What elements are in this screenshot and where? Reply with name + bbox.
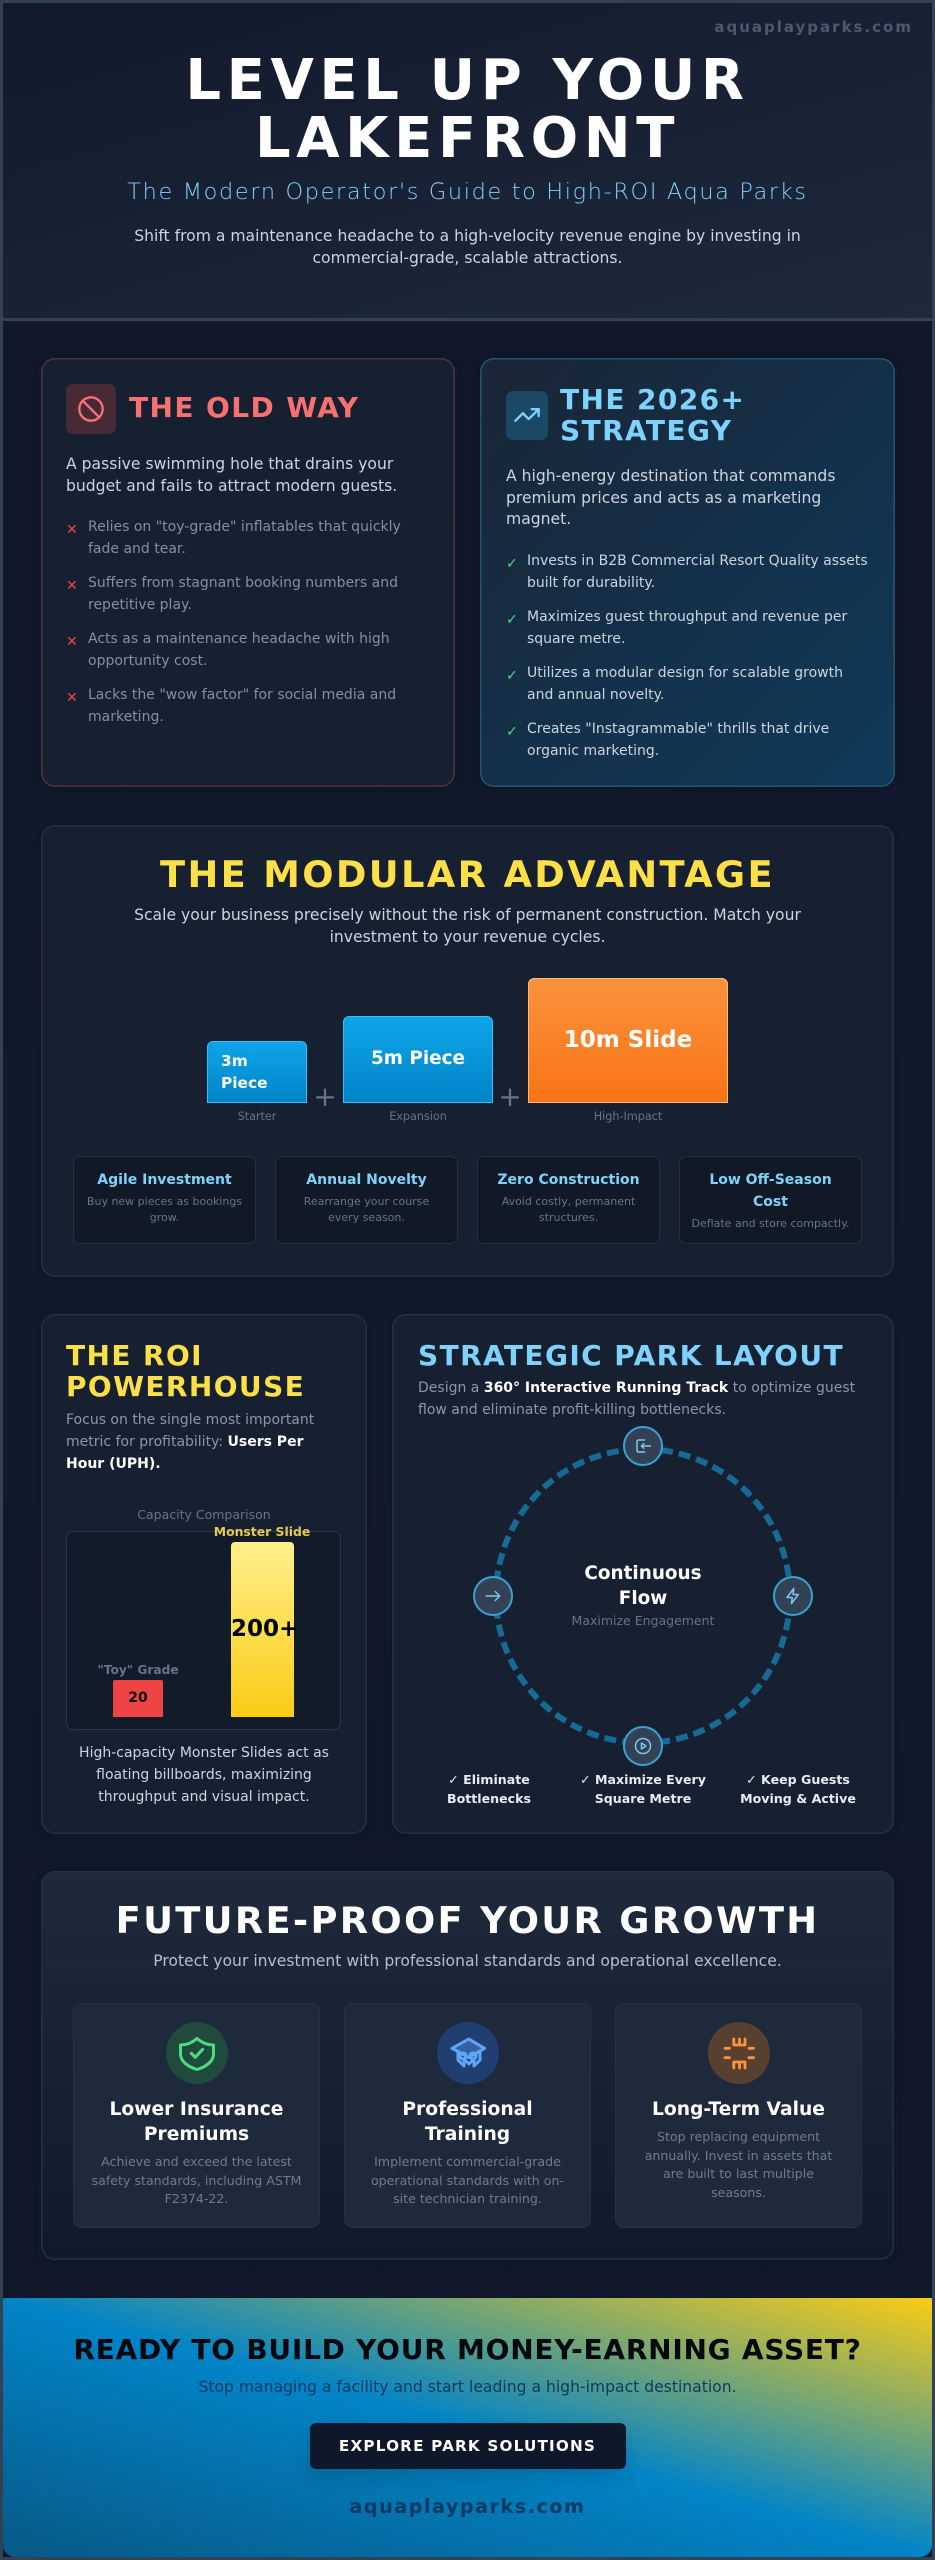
feature text: Buy new pieces as bookings: [87, 1195, 242, 1208]
benefit: eliminate bottlenecks: ✓ Eliminate: [448, 1772, 530, 1786]
description: Hour (UPH).: [66, 1456, 161, 1472]
feature title: Zero Construction: [497, 1172, 640, 1188]
card title: Lower Insurance: [110, 2098, 283, 2120]
description: [66, 455, 397, 495]
bar chart: [66, 1531, 341, 1730]
heading: THE 2026+: [560, 382, 745, 416]
list of benefits: [506, 553, 868, 759]
description: flow and eliminate profit-killing bottlenecks.: [418, 1402, 726, 1418]
running track ring: [493, 1446, 793, 1746]
description: [418, 1380, 855, 1418]
heading: FUTURE-PROOF YOUR GROWTH: [116, 1899, 819, 1942]
block label: 5m Piece: [371, 1048, 465, 1069]
feature: agile investment: [73, 1156, 256, 1244]
icon: ban: [66, 384, 116, 434]
description: Focus on the single most important: [66, 1412, 314, 1428]
card text: Stop replacing equipment: [657, 2129, 820, 2144]
description: A high-energy destination that commands: [506, 467, 835, 485]
check 1: ✓: [506, 556, 518, 572]
description: investment to your revenue cycles.: [330, 928, 605, 946]
drawback 4: marketing.: [88, 709, 164, 725]
check 2: ✓: [506, 612, 518, 628]
center sublabel: Maximize Engagement: [572, 1613, 714, 1628]
feature text: [304, 1195, 429, 1224]
mark 1: ✕: [66, 522, 78, 538]
cta heading: READY TO BUILD YOUR MONEY-EARNING ASSET?: [73, 2333, 862, 2366]
benefit: keep guests moving: [740, 1772, 856, 1806]
feature text: Avoid costly, permanent: [502, 1195, 635, 1208]
plus sign 1: +: [313, 1080, 337, 1113]
heading: THE ROI: [66, 1338, 203, 1372]
intro text: commercial-grade, scalable attractions.: [312, 249, 623, 267]
icon: entry node: [623, 1426, 663, 1466]
benefit 2: [527, 609, 848, 647]
benefit 3: Utilizes a modular design for scalable growth: [527, 665, 843, 681]
block label: 3m: [221, 1052, 248, 1070]
card text: operational standards with on-: [371, 2173, 564, 2188]
card title: Premiums: [144, 2124, 249, 2144]
block: 10m slide: [528, 978, 728, 1103]
title: [185, 48, 750, 170]
caption: floating billboards, maximizing: [96, 1767, 312, 1783]
icon: graduation cap: [436, 2022, 498, 2084]
call to action: [3, 2298, 932, 2557]
benefit: keep guests moving: Moving & Active: [740, 1790, 856, 1806]
mark 3: ✕: [66, 634, 78, 650]
intro text: Shift from a maintenance headache to a high-velocity revenue engine by investing in: [134, 227, 801, 245]
card: lower insurance premiums: [73, 2003, 320, 2228]
icon: shield: [166, 2022, 228, 2084]
block label: Piece: [221, 1074, 268, 1092]
heading: THE OLD WAY: [129, 391, 359, 424]
description: magnet.: [506, 510, 571, 528]
card text: [92, 2154, 301, 2206]
bar: monster slide: [231, 1542, 294, 1717]
card text: safety standards, including ASTM: [92, 2173, 301, 2188]
benefit 1: built for durability.: [527, 575, 655, 591]
benefit: keep guests moving: ✓ Keep Guests: [746, 1772, 850, 1786]
description: [66, 1412, 314, 1472]
description: premium prices and acts as a marketing: [506, 489, 821, 507]
check 4: ✓: [506, 724, 518, 740]
feature: zero construction: [477, 1156, 660, 1244]
center label: [584, 1563, 702, 1609]
drawback 3: Acts as a maintenance headache with high: [88, 631, 390, 647]
plus sign 2: +: [498, 1080, 522, 1113]
bar value: 200+: [231, 1616, 298, 1642]
benefit 1: [527, 553, 868, 591]
card: professional training: [344, 2003, 591, 2228]
feature text: structures.: [539, 1211, 598, 1224]
panel: the modular advantage: [41, 825, 894, 1277]
center label: Flow: [619, 1588, 667, 1609]
benefit 3: [527, 665, 843, 703]
drawback 1: fade and tear.: [88, 541, 186, 557]
block label: 10m Slide: [564, 1027, 692, 1053]
card title: Professional: [402, 2098, 533, 2120]
heading: THE MODULAR ADVANTAGE: [160, 853, 775, 896]
feature title: [709, 1172, 832, 1210]
drawback 2: repetitive play.: [88, 597, 192, 613]
description: Scale your business precisely without the risk of permanent construction. Match your: [134, 906, 801, 924]
drawback 4: [88, 687, 396, 725]
icon: play node: [623, 1726, 663, 1766]
panel: the old way: [41, 358, 455, 787]
caption: [79, 1745, 329, 1805]
subtitle: The Modern Operator's Guide to High-ROI Aqua Parks: [127, 179, 808, 205]
card text: are built to last multiple: [663, 2166, 814, 2181]
title: LEVEL UP YOUR: [185, 48, 750, 113]
feature title: Low Off-Season: [709, 1172, 832, 1188]
intro text: [134, 227, 801, 267]
panel: the 2026+ strategy: [480, 358, 895, 787]
card text: Implement commercial-grade: [374, 2154, 561, 2169]
header: [0, 0, 935, 321]
benefit: maximize every square metre: [580, 1772, 706, 1806]
drawback 3: [88, 631, 390, 669]
icon: long-term value: [708, 2022, 770, 2084]
drawback 1: Relies on "toy-grade" inflatables that quickly: [88, 519, 401, 535]
description: [506, 467, 835, 528]
panel: the roi powerhouse: [41, 1314, 367, 1834]
description: budget and fails to attract modern guests.: [66, 477, 397, 495]
bar label: toy grade: "Toy" Grade: [97, 1663, 179, 1677]
description: Protect your investment with professional standards and operational excellence.: [153, 1952, 782, 1970]
card text: annually. Invest in assets that: [645, 2148, 832, 2163]
check 3: ✓: [506, 668, 518, 684]
mark 4: ✕: [66, 690, 78, 706]
benefit 4: [527, 721, 829, 759]
heading: POWERHOUSE: [66, 1370, 305, 1402]
drawback 2: Suffers from stagnant booking numbers and: [88, 575, 398, 591]
feature text: Deflate and store compactly.: [691, 1217, 850, 1230]
benefit 2: Maximizes guest throughput and revenue per: [527, 609, 847, 625]
feature title: Agile Investment: [97, 1172, 232, 1188]
website url: aquaplayparks.com: [349, 2495, 586, 2518]
title: LAKEFRONT: [255, 106, 680, 170]
card text: F2374-22.: [165, 2191, 228, 2206]
benefit 4: organic marketing.: [527, 743, 659, 759]
bar: toy grade: [113, 1680, 163, 1717]
feature text: every season.: [328, 1211, 405, 1224]
bar label: monster slide: Monster Slide: [214, 1524, 310, 1539]
card title: Training: [425, 2124, 510, 2144]
card title: [402, 2098, 533, 2144]
drawback 2: [88, 575, 398, 613]
card text: Achieve and exceed the latest: [101, 2154, 292, 2169]
description: A passive swimming hole that drains your: [66, 455, 393, 473]
feature text: [87, 1195, 242, 1224]
description: metric for profitability: Users Per: [66, 1434, 303, 1450]
benefit: eliminate bottlenecks: [447, 1772, 531, 1806]
description: [134, 906, 801, 946]
heading: [66, 1338, 305, 1402]
card title: Long-Term Value: [652, 2098, 825, 2120]
benefit 3: and annual novelty.: [527, 687, 664, 703]
caption: High-capacity Monster Slides act as: [79, 1745, 329, 1761]
panel: future-proof your growth: [41, 1871, 894, 2260]
benefit: maximize every square metre: Square Metre: [595, 1790, 691, 1806]
block label: [221, 1052, 268, 1092]
description: Design a 360° Interactive Running Track to optimize guest: [418, 1380, 855, 1396]
card text: [371, 2154, 564, 2206]
benefit: maximize every square metre: ✓ Maximize Every: [580, 1772, 706, 1786]
feature title: Annual Novelty: [306, 1172, 427, 1188]
caption: starter: Starter: [238, 1110, 276, 1123]
panel: strategic park layout: [392, 1314, 894, 1834]
feature: low off-season cost: [679, 1156, 862, 1244]
button: [310, 2423, 626, 2469]
icon: arrow node: [473, 1576, 513, 1616]
card text: [645, 2129, 832, 2200]
drawback 1: [88, 519, 401, 557]
feature text: [502, 1195, 636, 1224]
feature text: Rearrange your course: [304, 1195, 429, 1208]
heading: STRATEGY: [560, 414, 732, 446]
card: long-term value: [615, 2003, 862, 2228]
block: 5m piece: [343, 1016, 493, 1103]
caption: high-impact: High-Impact: [594, 1110, 662, 1123]
icon: lightning node: [773, 1576, 813, 1616]
card text: seasons.: [711, 2185, 766, 2200]
block: 3m piece: [207, 1041, 307, 1103]
icon: trending up: [506, 391, 548, 440]
benefit 1: Invests in B2B Commercial Resort Quality assets: [527, 553, 868, 569]
benefit: eliminate bottlenecks: Bottlenecks: [447, 1790, 531, 1806]
button label: EXPLORE PARK SOLUTIONS: [339, 2437, 596, 2455]
card title: [110, 2098, 283, 2144]
drawback 3: opportunity cost.: [88, 653, 208, 669]
chart label: Capacity Comparison: [137, 1507, 271, 1522]
benefit 4: Creates "Instagrammable" thrills that drive: [527, 721, 829, 737]
list of drawbacks: [66, 519, 401, 725]
drawback 4: Lacks the "wow factor" for social media and: [88, 687, 396, 703]
center label: Continuous: [584, 1563, 702, 1584]
feature: annual novelty: [275, 1156, 458, 1244]
caption: throughput and visual impact.: [98, 1789, 310, 1805]
benefit 2: square metre.: [527, 631, 625, 647]
caption: expansion: Expansion: [389, 1110, 447, 1123]
heading: [560, 382, 745, 446]
cta text: Stop managing a facility and start leading a high-impact destination.: [198, 2378, 737, 2396]
bar value: 20: [128, 1690, 148, 1706]
feature text: grow.: [150, 1211, 179, 1224]
feature title: Cost: [753, 1194, 788, 1210]
card text: site technician training.: [393, 2191, 542, 2206]
heading: STRATEGIC PARK LAYOUT: [418, 1338, 844, 1372]
website url: aquaplayparks.com: [714, 18, 913, 36]
mark 2: ✕: [66, 578, 78, 594]
